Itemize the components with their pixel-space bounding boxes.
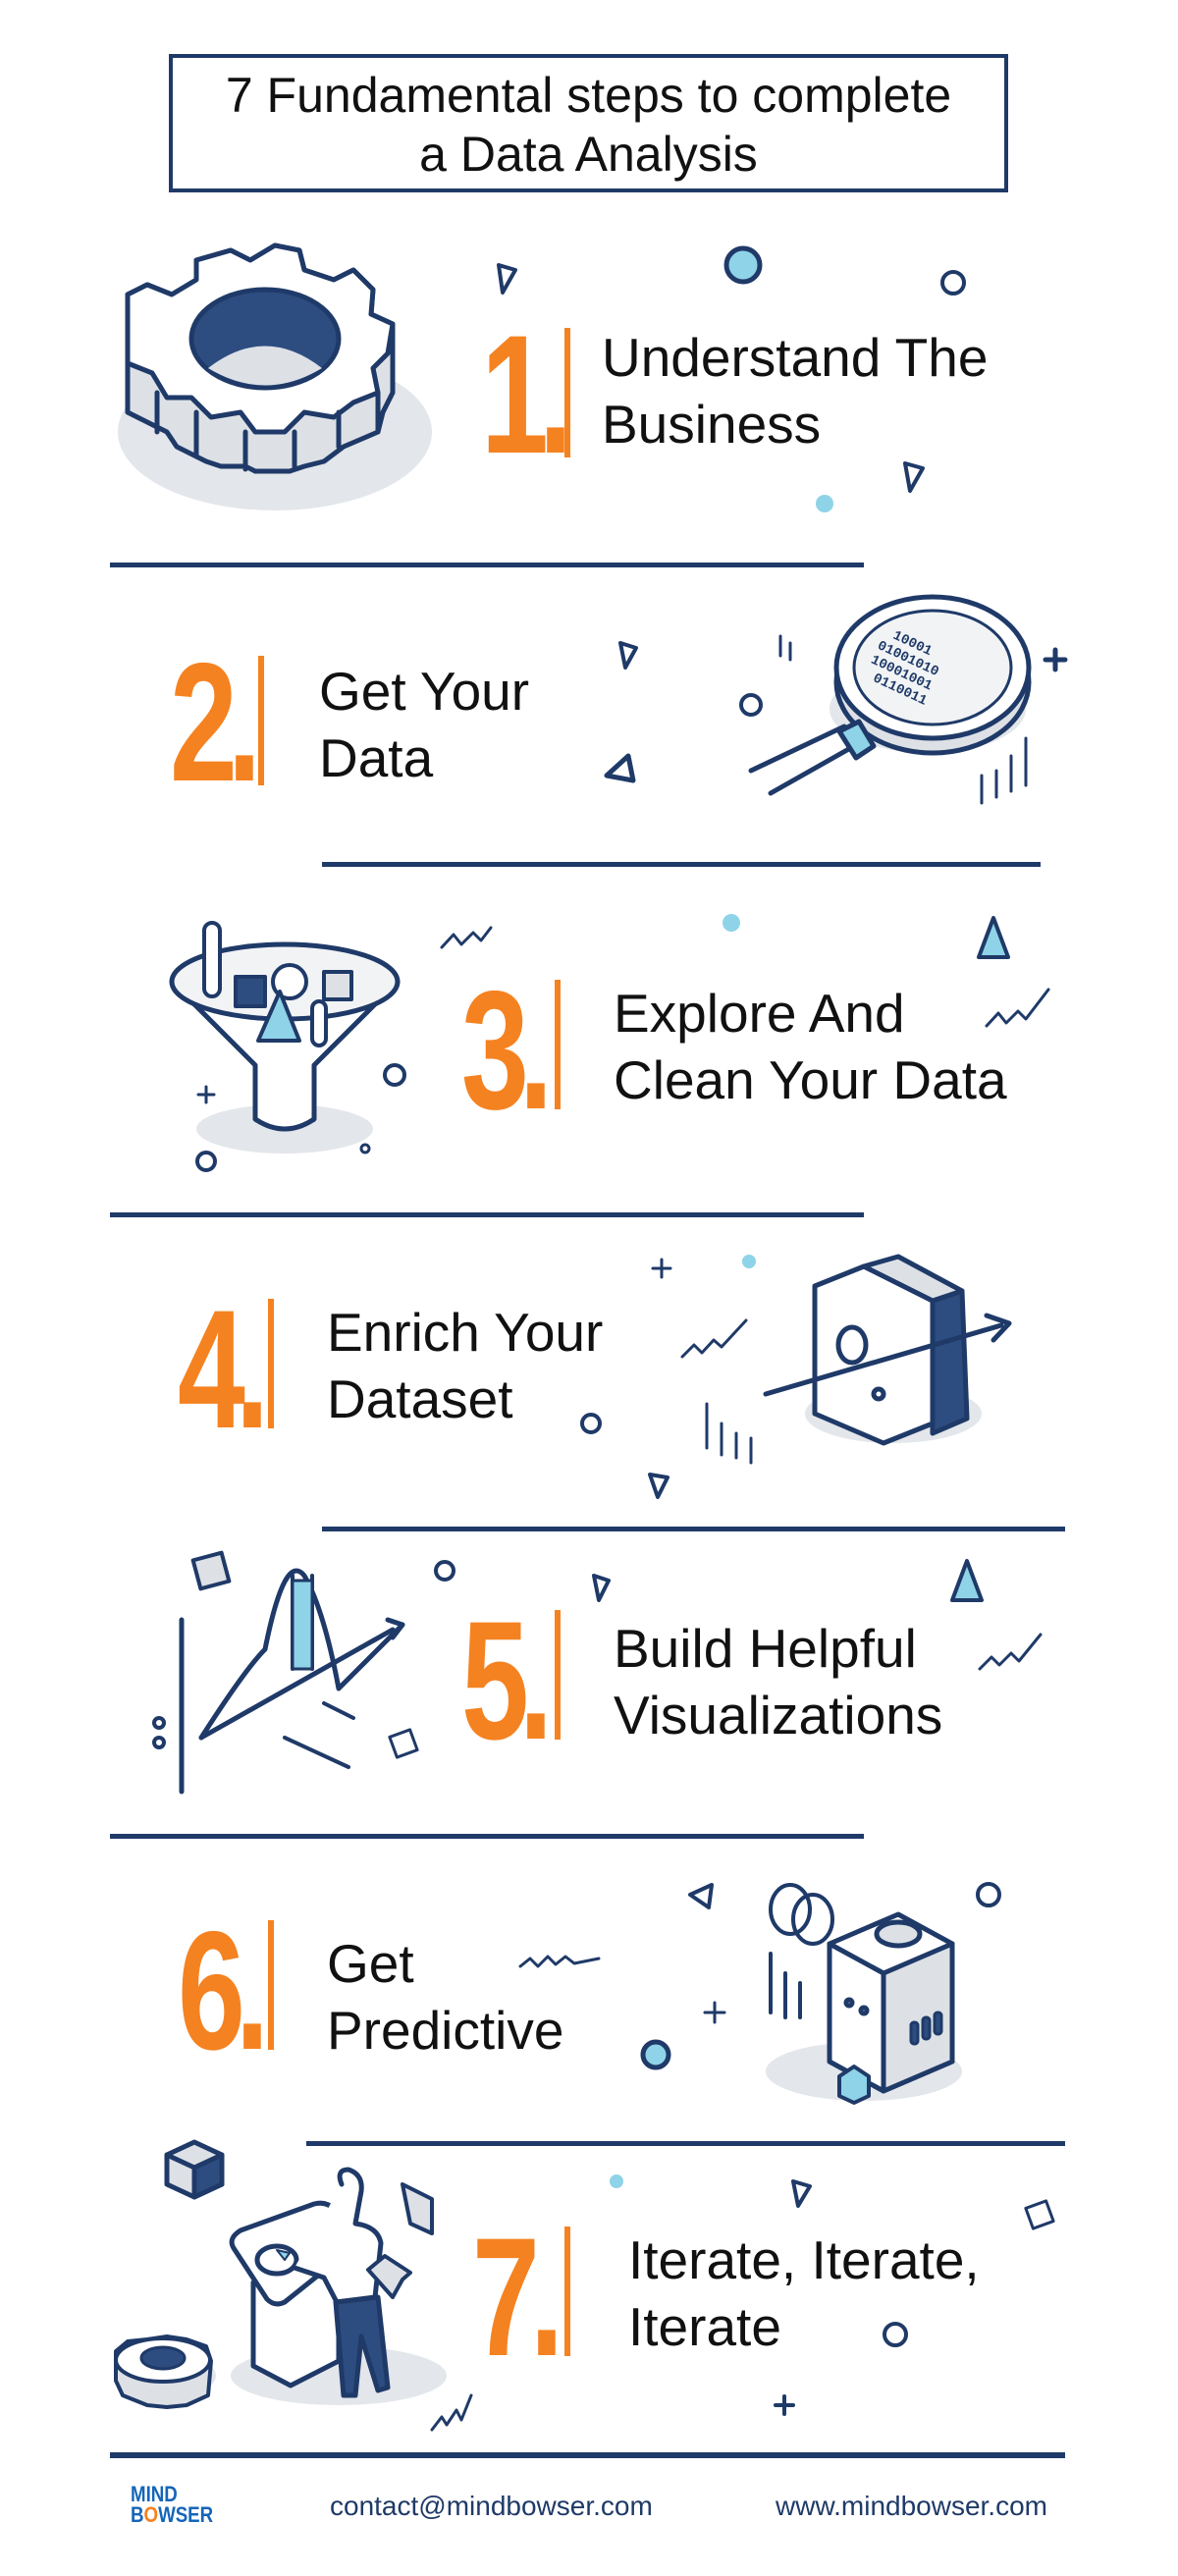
icon: magnifier: 10001001 [868, 653, 935, 695]
step 6: Get [327, 1933, 414, 1994]
icon: step1 decorations [499, 248, 964, 512]
title [169, 54, 1008, 192]
step 7: 7. [472, 2203, 554, 2391]
step 6: 6. [178, 1897, 259, 2085]
step 1: 1. [481, 300, 562, 489]
step 5 [461, 1586, 942, 1775]
icon: magnifier: 10001 [890, 628, 935, 660]
icon: robot [520, 1884, 999, 2103]
icon: isometric box [582, 1255, 1009, 1497]
step 5: 5. [461, 1586, 543, 1775]
step 3: Explore And [614, 983, 905, 1044]
icon: magnifier: 0110011 [871, 671, 930, 710]
step 4 [178, 1275, 603, 1464]
icon: gear [118, 245, 432, 510]
step 4: Enrich Your [327, 1302, 603, 1363]
logo: BOWSER [131, 2502, 213, 2527]
title: a Data Analysis [419, 127, 758, 182]
logo [131, 2482, 213, 2527]
divider [110, 563, 864, 567]
step 4: 4. [178, 1275, 259, 1464]
step 1 [481, 300, 988, 489]
icon: magnifier: 01001010 [875, 638, 941, 680]
step 1: Understand The [602, 327, 988, 388]
step 2: 2. [170, 628, 251, 817]
step 2 [170, 628, 529, 817]
step 2: Get Your [319, 661, 529, 722]
contact email: contact@mindbowser.com [330, 2491, 653, 2521]
step 7: Iterate, Iterate, [628, 2229, 980, 2290]
step 3: 3. [461, 956, 543, 1145]
step 7 [472, 2203, 980, 2391]
title: 7 Fundamental steps to complete [226, 68, 951, 123]
icon: person at podium [167, 2142, 471, 2430]
icon: magnifier [607, 597, 1065, 803]
icon: distribution chart [154, 1553, 1041, 1792]
step 7: Iterate [628, 2296, 781, 2357]
footer rule [110, 2452, 1065, 2458]
logo: MIND [131, 2482, 178, 2506]
step 4: Dataset [327, 1368, 513, 1429]
icon: funnel [172, 914, 1048, 1170]
step 5: Build Helpful [614, 1618, 917, 1679]
step 6: Predictive [327, 2000, 563, 2061]
step 3: Clean Your Data [614, 1049, 1007, 1110]
icon: step7 decorations [610, 2174, 1053, 2414]
icon: small gear [116, 2336, 216, 2407]
step 2: Data [319, 727, 433, 788]
website: www.mindbowser.com [776, 2491, 1047, 2521]
step 5: Visualizations [614, 1685, 942, 1745]
step 6 [178, 1897, 563, 2085]
step 1: Business [602, 394, 821, 455]
step 3 [461, 956, 1007, 1145]
